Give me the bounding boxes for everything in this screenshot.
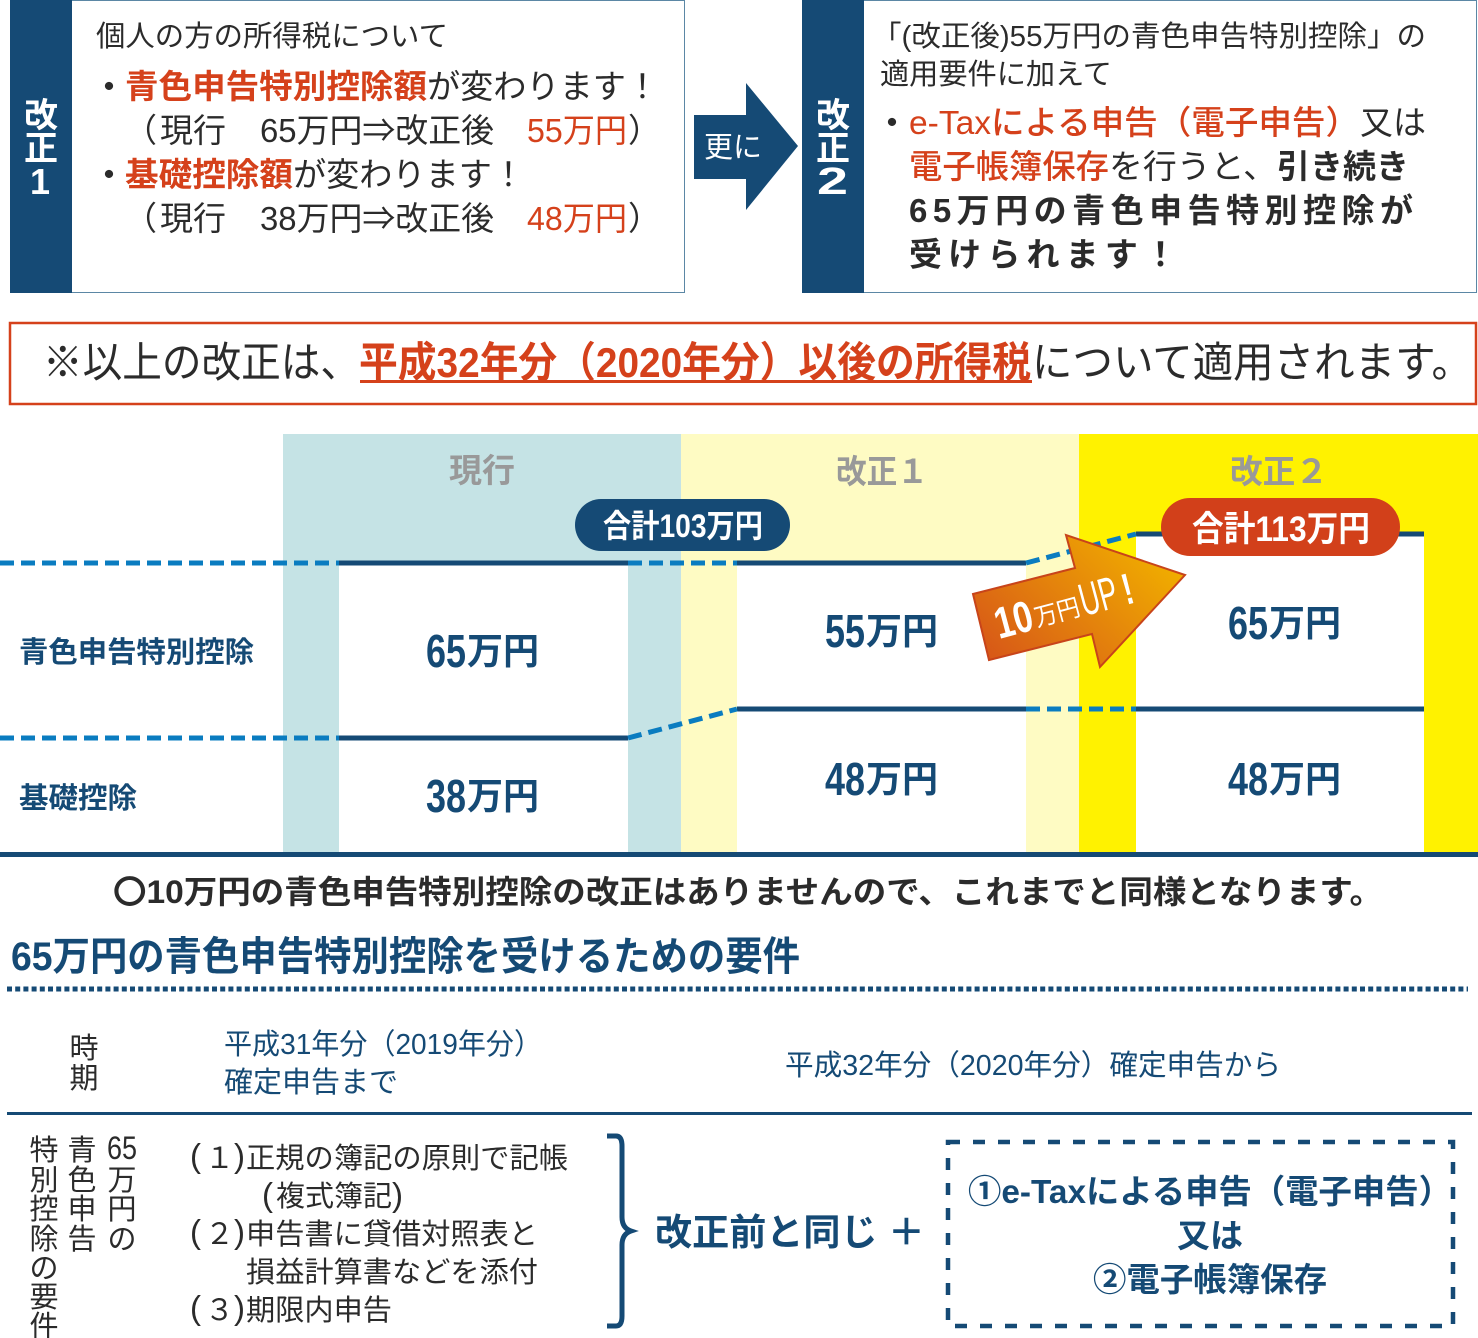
list: requirements: ( xyxy=(262,1176,273,1213)
text: e-Tax requirement: e-Taxによる申告（電子申告） xyxy=(909,104,1359,141)
text: basic deduction change: 基礎控除額 xyxy=(125,156,293,193)
value: revision 1 55: 55 xyxy=(825,605,865,657)
arrow: 10 man yen up: UP xyxy=(1073,566,1123,626)
dashed box: additional requirements: ②電子帳簿保存 xyxy=(1093,1261,1327,1298)
text: e-Tax requirement: 又は xyxy=(1360,104,1426,141)
pill: total 103 xyxy=(575,499,790,551)
text: e-Tax requirement: 65万円の青色申告特別控除が xyxy=(909,192,1413,229)
value: revision 2 65 xyxy=(1228,597,1341,649)
pill: total 113 xyxy=(1161,498,1400,556)
list: requirements: １ xyxy=(205,1143,234,1175)
period: from 2020: 平成32年分（2020年分）確定申告から xyxy=(785,1049,1281,1082)
panel: revision 1 xyxy=(10,0,684,293)
value: revision 1 48 xyxy=(825,753,938,805)
period: until 2019: 平成31年分（2019年分） xyxy=(224,1028,542,1061)
text: blue return deduction change: ・ xyxy=(93,69,125,105)
notice box: 平成32年分（2020年分）以後の所得税 xyxy=(359,339,1031,386)
text: e-Tax requirement: ・ xyxy=(876,105,908,141)
label: revision 2: 改 xyxy=(816,97,850,135)
text: blue return deduction change: 65万円⇒改正後 xyxy=(260,112,494,149)
chart: deduction comparison xyxy=(0,434,1478,857)
value: current 65 xyxy=(426,625,539,677)
value: revision 1 55 xyxy=(825,605,938,657)
row header: requirements: 色 xyxy=(67,1164,97,1197)
text: intro xyxy=(872,20,1426,91)
list: requirements: ( xyxy=(190,1137,201,1174)
arrow: 10 man yen up: 万円 xyxy=(1031,594,1083,633)
text: e-Tax requirement: 電子帳簿保存 xyxy=(909,148,1109,185)
row header: requirements: の xyxy=(29,1253,59,1285)
row header: requirements: 万 xyxy=(107,1165,137,1197)
panel: revision 2 xyxy=(802,0,1476,293)
row header: requirements xyxy=(29,1130,137,1338)
value: current 38: 38 xyxy=(426,770,466,822)
row label: basic deduction: 基礎控除 xyxy=(19,782,137,815)
row label: blue return deduction: 青色申告特別控除 xyxy=(19,636,254,669)
list: requirements: ( xyxy=(190,1213,201,1250)
pill: total 113: 合計113万円 xyxy=(1192,510,1370,549)
text: basic deduction change: 現行 xyxy=(160,200,226,237)
list: requirements: ) xyxy=(392,1176,403,1213)
text: basic deduction change: 48万円 xyxy=(527,200,627,237)
line: top totals xyxy=(0,534,1424,563)
text: intro: 適用要件に加えて xyxy=(880,58,1112,91)
period: until 2019 xyxy=(224,1028,542,1099)
text: blue return deduction change: 青色申告特別控除額 xyxy=(125,68,427,105)
arrow: 10 man yen up: ! xyxy=(1116,565,1139,614)
arrow: further: 更に xyxy=(704,132,762,164)
label: revision 2: 2 xyxy=(817,161,848,203)
row header: requirements: 青 xyxy=(67,1134,97,1167)
dashed box: additional requirements: ①e-Taxによる申告（電子申告） xyxy=(968,1173,1452,1210)
value: current 65: 65 xyxy=(426,625,466,677)
list: requirements: 申告書に貸借対照表と xyxy=(246,1218,538,1251)
row header: requirements: 円 xyxy=(107,1194,137,1226)
value: revision 2 48: 万円 xyxy=(1269,759,1341,800)
column header: revision 1: 改正１ xyxy=(836,453,928,490)
text: blue return deduction change: ） xyxy=(628,112,661,149)
text: e-Tax requirement: を行うと、 xyxy=(1109,148,1277,185)
notice box: について適用されます。 xyxy=(1032,339,1472,386)
text: blue return deduction change: 現行 xyxy=(160,112,226,149)
column header: current: 現行 xyxy=(449,452,515,489)
label: revision 1: 1 xyxy=(30,161,50,202)
baseline xyxy=(0,852,1478,857)
list: requirements xyxy=(190,1137,568,1327)
column header: revision 2: 改正２ xyxy=(1230,453,1328,490)
value: revision 2 48: 48 xyxy=(1228,753,1268,805)
row header: requirements: の xyxy=(107,1224,137,1256)
column backgrounds xyxy=(283,434,1478,853)
row header: period: 期 xyxy=(69,1063,99,1095)
pill: total 103: 合計103万円 xyxy=(603,508,763,544)
text: basic deduction change: ・ xyxy=(93,157,125,193)
arrow: further xyxy=(694,83,798,210)
value: current 38 xyxy=(426,770,539,822)
dashed box: additional requirements xyxy=(948,1142,1453,1326)
row header: requirements: 要 xyxy=(29,1282,59,1314)
arrow: 10 man yen up: 10 xyxy=(989,591,1038,649)
label: revision 1: 改 xyxy=(24,97,58,135)
row header: requirements: 除 xyxy=(29,1223,59,1256)
row header: requirements: 65 xyxy=(107,1130,137,1166)
value: revision 1 48: 万円 xyxy=(866,759,938,800)
label: revision 1: 正 xyxy=(24,130,58,168)
list: requirements: ) xyxy=(234,1137,245,1174)
notice box xyxy=(10,323,1476,404)
value: revision 1 55: 万円 xyxy=(866,611,938,652)
row header: requirements: 告 xyxy=(67,1223,97,1256)
dashed box: additional requirements: 又は xyxy=(1177,1217,1243,1254)
list: requirements: ) xyxy=(234,1213,245,1250)
text: basic deduction change xyxy=(93,156,661,237)
text: basic deduction change: ） xyxy=(628,200,661,237)
text: same as before plus: 改正前と同じ ＋ xyxy=(655,1212,925,1253)
value: current 65: 万円 xyxy=(467,631,539,672)
text: e-Tax requirement: 受けられます！ xyxy=(909,236,1177,273)
row header: requirements: 別 xyxy=(29,1165,59,1197)
text: intro: 「(改正後)55万円の青色申告特別控除」の xyxy=(872,20,1426,53)
line: basic deduction boundary xyxy=(0,709,1424,738)
value: revision 2 65: 65 xyxy=(1228,597,1268,649)
text: e-Tax requirement: 引き続き xyxy=(1277,148,1409,185)
row header: period xyxy=(69,1032,99,1095)
row header: requirements: 特 xyxy=(29,1134,59,1167)
label: revision 2 xyxy=(802,0,864,293)
note: no change to 100k deduction: 〇10万円の青色申告特別控除の改正はありませんので、これまでと同様となります。 xyxy=(113,874,1383,910)
label: revision 1 xyxy=(10,0,72,293)
text: blue return deduction change: 55万円 xyxy=(527,112,627,149)
row header: period: 時 xyxy=(69,1032,99,1065)
table: requirements timeline xyxy=(7,1028,1472,1338)
list: requirements: 複式簿記 xyxy=(276,1180,392,1213)
list: requirements: ２ xyxy=(205,1219,234,1251)
list: requirements: ( xyxy=(190,1289,201,1326)
value: current 38: 万円 xyxy=(467,776,539,817)
heading: requirements: 65万円の青色申告特別控除を受けるための要件 xyxy=(11,935,800,979)
value: revision 1 48: 48 xyxy=(825,753,865,805)
row header: requirements: 控 xyxy=(29,1193,59,1226)
list: requirements: 期限内申告 xyxy=(246,1294,392,1327)
text: blue return deduction change: が変わります！ xyxy=(427,68,659,105)
text: e-Tax requirement xyxy=(876,104,1426,273)
text: blue return deduction change xyxy=(93,68,661,149)
text: basic deduction change: （ xyxy=(124,200,157,237)
list: requirements: ３ xyxy=(205,1295,234,1327)
text: blue return deduction change: （ xyxy=(124,112,157,149)
label: revision 2: 正 xyxy=(816,130,850,168)
list: requirements: 正規の簿記の原則で記帳 xyxy=(246,1142,568,1175)
brace xyxy=(607,1136,631,1326)
arrow: 10 man yen up xyxy=(973,535,1185,667)
value: revision 2 48 xyxy=(1228,753,1341,805)
text: basic deduction change: 38万円⇒改正後 xyxy=(260,200,494,237)
list: requirements: 損益計算書などを添付 xyxy=(246,1256,538,1289)
value: revision 2 65: 万円 xyxy=(1269,603,1341,644)
notice box: ※以上の改正は、 xyxy=(43,339,360,386)
text: basic deduction change: が変わります！ xyxy=(293,156,525,193)
list: requirements: ) xyxy=(234,1289,245,1326)
row header: requirements: 申 xyxy=(67,1193,97,1226)
text: intro: 個人の方の所得税について xyxy=(96,20,448,53)
period: until 2019: 確定申告まで xyxy=(224,1066,398,1099)
